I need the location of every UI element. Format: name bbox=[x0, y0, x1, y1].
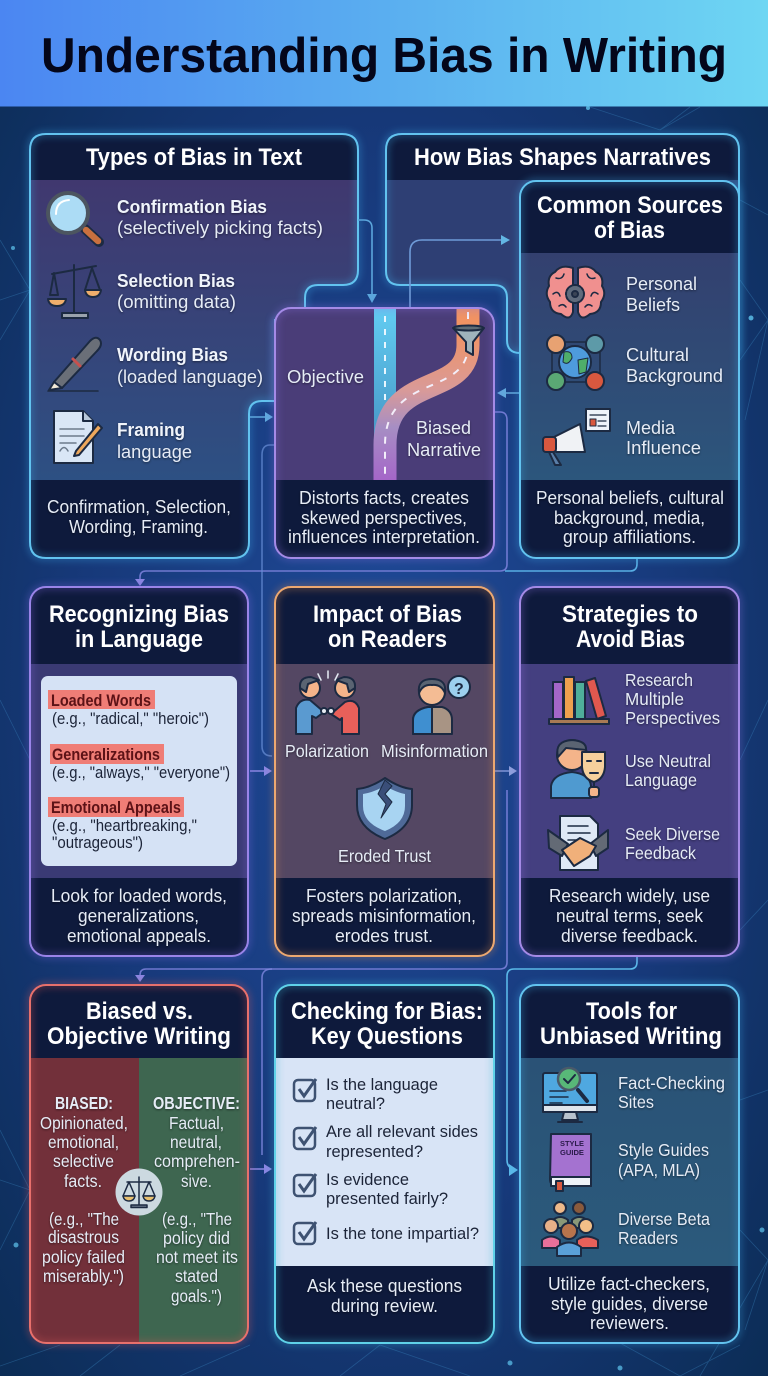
example: loaded words: (e.g., "radical," "heroic") bbox=[52, 709, 209, 728]
heading: on Readers bbox=[328, 626, 447, 653]
footer summary bbox=[307, 1275, 462, 1316]
heading: Types of Bias in Text bbox=[86, 144, 302, 171]
text: seek diverse feedback bbox=[625, 824, 720, 863]
text: use neutral language bbox=[625, 751, 711, 790]
text: confirmation bias: Confirmation Bias bbox=[117, 196, 267, 217]
icon: magnifying glass bbox=[48, 193, 99, 242]
title banner bbox=[0, 0, 768, 106]
heading: Recognizing Bias bbox=[49, 601, 229, 628]
column: objective: neutral, bbox=[170, 1132, 222, 1152]
icon: handshake over document bbox=[548, 816, 608, 870]
column: objective: policy did bbox=[163, 1228, 230, 1248]
text: selection bias: (omitting data) bbox=[117, 291, 236, 312]
text: seek diverse feedback: Seek Diverse bbox=[625, 824, 720, 844]
footer summary bbox=[548, 1273, 710, 1333]
text: use neutral language: Language bbox=[625, 770, 697, 790]
question 3: presented fairly? bbox=[326, 1189, 448, 1208]
text: wording bias: Wording Bias bbox=[117, 344, 228, 365]
footer summary: Distorts facts, creates bbox=[299, 487, 469, 508]
text: selection bias: Selection Bias bbox=[117, 270, 235, 291]
label: misinformation: Misinformation bbox=[381, 741, 488, 761]
book title bbox=[560, 1139, 584, 1157]
footer summary: erodes trust. bbox=[335, 925, 433, 946]
heading: Common Sources bbox=[537, 192, 723, 219]
footer summary: influences interpretation. bbox=[288, 526, 480, 547]
heading: Tools for bbox=[586, 998, 677, 1025]
footer summary: Utilize fact-checkers, bbox=[548, 1273, 710, 1294]
chart: objective and biased roads bbox=[374, 300, 468, 480]
text: framing language: Framing bbox=[117, 419, 185, 440]
question 2: represented? bbox=[326, 1142, 423, 1161]
icon: megaphone and newspaper bbox=[543, 409, 610, 465]
icon: style guide book bbox=[550, 1134, 591, 1191]
footer summary: style guides, diverse bbox=[551, 1293, 708, 1314]
text: media influence: Influence bbox=[626, 437, 701, 458]
label: biased narrative: Narrative bbox=[407, 439, 481, 460]
footer summary: neutral terms, seek bbox=[556, 905, 704, 926]
footer summary: Fosters polarization, bbox=[306, 885, 462, 906]
heading: How Bias Shapes Narratives bbox=[414, 144, 711, 171]
column: biased: emotional, bbox=[48, 1132, 119, 1152]
text: media influence bbox=[626, 417, 701, 458]
text: wording bias: (loaded language) bbox=[117, 366, 263, 387]
icon: balance scale bbox=[48, 265, 101, 318]
heading: Key Questions bbox=[311, 1023, 463, 1050]
icon: brain with gear bbox=[547, 267, 604, 318]
question 1: neutral? bbox=[326, 1094, 385, 1113]
card: bias language examples bbox=[41, 676, 237, 866]
column: biased: miserably.") bbox=[43, 1266, 124, 1286]
text: research multiple perspectives bbox=[625, 670, 720, 728]
heading bbox=[562, 601, 698, 653]
icon: cracked shield bbox=[357, 778, 412, 839]
question 4: Is the tone impartial? bbox=[326, 1224, 479, 1243]
question 1: Is the language bbox=[326, 1075, 438, 1094]
text: cultural background bbox=[626, 344, 723, 386]
column: objective: comprehen- bbox=[154, 1151, 240, 1171]
text: cultural background: Cultural bbox=[626, 344, 689, 365]
footer summary: diverse feedback. bbox=[561, 925, 698, 946]
footer summary: skewed perspectives, bbox=[301, 507, 467, 528]
text: wording bias bbox=[117, 344, 263, 387]
column: objective: stated bbox=[175, 1266, 218, 1286]
footer summary bbox=[549, 885, 710, 946]
footer summary: during review. bbox=[331, 1295, 438, 1316]
label: eroded trust: Eroded Trust bbox=[338, 846, 431, 866]
footer summary: emotional appeals. bbox=[67, 925, 211, 946]
highlight: emotional appeals: Emotional Appeals bbox=[51, 799, 181, 817]
heading: Objective Writing bbox=[47, 1023, 231, 1050]
book title: GUIDE bbox=[560, 1148, 584, 1157]
icon: scale badge bbox=[116, 1168, 162, 1216]
icon: monitor with magnifier check bbox=[543, 1068, 597, 1122]
column: objective: sive. bbox=[181, 1171, 212, 1191]
text: style guides: Style Guides bbox=[618, 1140, 709, 1160]
icon: pen bbox=[48, 338, 101, 391]
footer summary: Look for loaded words, bbox=[51, 885, 227, 906]
text: personal beliefs: Beliefs bbox=[626, 294, 680, 315]
label: objective: Objective bbox=[287, 366, 364, 387]
panel: tools for unbiased writing bbox=[520, 985, 739, 1343]
panel: impact of bias on readers bbox=[275, 587, 494, 956]
panel: center objective vs biased narrative bbox=[275, 300, 494, 558]
column: biased: (e.g., "The bbox=[49, 1209, 119, 1229]
text: personal beliefs bbox=[626, 273, 697, 315]
icon: misinformation, person with question bubble bbox=[413, 676, 470, 734]
panel: recognizing bias in language bbox=[30, 587, 248, 956]
heading bbox=[291, 998, 483, 1050]
panel: common sources of bias bbox=[520, 181, 739, 558]
footer summary bbox=[288, 487, 480, 547]
question 3 bbox=[294, 1170, 448, 1208]
text: research multiple perspectives: Multiple bbox=[625, 689, 684, 709]
example: emotional appeals: "outrageous") bbox=[52, 833, 143, 852]
footer summary bbox=[536, 487, 724, 547]
text: selection bias bbox=[117, 270, 236, 312]
question 2: Are all relevant sides bbox=[326, 1122, 478, 1141]
text: framing language: language bbox=[117, 441, 192, 462]
footer summary: Wording, Framing. bbox=[69, 516, 208, 537]
heading: of Bias bbox=[594, 217, 665, 244]
text: framing language bbox=[117, 419, 192, 462]
heading bbox=[537, 192, 723, 244]
footer summary: Research widely, use bbox=[549, 885, 710, 906]
example: generalizations: (e.g., "always," "everyone") bbox=[52, 763, 230, 782]
column: biased: disastrous bbox=[48, 1227, 119, 1247]
icon: document with pencil bbox=[54, 411, 102, 463]
column: objective: Factual, bbox=[169, 1113, 224, 1133]
panel: strategies to avoid bias bbox=[520, 587, 739, 956]
text: fact-checking sites: Fact-Checking bbox=[618, 1073, 725, 1093]
label: polarization: Polarization bbox=[285, 741, 369, 761]
title: Understanding Bias in Writing bbox=[41, 29, 727, 83]
column: objective: not meet its bbox=[156, 1247, 238, 1267]
text: style guides: (APA, MLA) bbox=[618, 1160, 700, 1180]
column: biased bbox=[40, 1093, 128, 1286]
heading bbox=[540, 998, 722, 1050]
column: biased: BIASED: bbox=[55, 1093, 113, 1113]
label: biased narrative: Biased bbox=[416, 417, 471, 438]
column: biased: selective bbox=[53, 1151, 114, 1171]
text: personal beliefs: Personal bbox=[626, 273, 697, 294]
text: diverse beta readers: Diverse Beta bbox=[618, 1209, 710, 1229]
panel: how bias shapes narratives bbox=[380, 130, 745, 360]
text: diverse beta readers bbox=[618, 1209, 710, 1248]
text: diverse beta readers: Readers bbox=[618, 1228, 678, 1248]
panel: checking for bias key questions bbox=[275, 985, 494, 1343]
heading: Biased vs. bbox=[86, 998, 193, 1025]
text: use neutral language: Use Neutral bbox=[625, 751, 711, 771]
panel: types of bias in text bbox=[28, 130, 363, 562]
checklist bbox=[294, 1075, 479, 1244]
footer summary: Ask these questions bbox=[307, 1275, 462, 1296]
text: research multiple perspectives: Research bbox=[625, 670, 693, 690]
book title: STYLE bbox=[560, 1139, 584, 1148]
question 3: Is evidence bbox=[326, 1170, 409, 1189]
heading: Avoid Bias bbox=[576, 626, 685, 653]
heading: Impact of Bias bbox=[313, 601, 462, 628]
footer summary: reviewers. bbox=[590, 1312, 669, 1333]
heading: Strategies to bbox=[562, 601, 698, 628]
question 2 bbox=[294, 1122, 478, 1161]
column: biased: facts. bbox=[64, 1171, 102, 1191]
footer summary: background, media, bbox=[554, 507, 705, 528]
heading bbox=[313, 601, 462, 653]
question 1 bbox=[294, 1075, 438, 1113]
panel: biased vs objective writing bbox=[30, 985, 248, 1343]
column: objective: (e.g., "The bbox=[162, 1209, 232, 1229]
icon: funnel bbox=[453, 326, 484, 355]
connector arrows behind panels bbox=[135, 220, 637, 1176]
highlight: loaded words: Loaded Words bbox=[51, 692, 151, 710]
text: research multiple perspectives: Perspectives bbox=[625, 708, 720, 728]
highlight: generalizations: Generalizations bbox=[52, 746, 160, 764]
text: style guides bbox=[618, 1140, 709, 1180]
question 4 bbox=[294, 1222, 479, 1244]
question mark: ? bbox=[454, 681, 464, 698]
example: emotional appeals: (e.g., "heartbreaking," bbox=[52, 816, 197, 835]
heading bbox=[47, 998, 231, 1050]
footer summary bbox=[292, 885, 476, 946]
label: biased narrative bbox=[407, 417, 481, 460]
text: fact-checking sites bbox=[618, 1073, 725, 1112]
heading: in Language bbox=[75, 626, 203, 653]
text: cultural background: Background bbox=[626, 365, 723, 386]
column: objective bbox=[153, 1093, 240, 1306]
text: confirmation bias: (selectively picking facts) bbox=[117, 217, 323, 238]
footer summary: generalizations, bbox=[78, 905, 199, 926]
icon: person holding neutral mask bbox=[551, 740, 605, 798]
footer summary bbox=[51, 885, 227, 946]
footer summary: Personal beliefs, cultural bbox=[536, 487, 724, 508]
footer summary bbox=[47, 496, 231, 537]
footer summary: Confirmation, Selection, bbox=[47, 496, 231, 517]
heading bbox=[49, 601, 229, 653]
column: objective: goals.") bbox=[171, 1286, 222, 1306]
icon: globe and people bbox=[547, 335, 604, 390]
column: biased: policy failed bbox=[42, 1247, 125, 1267]
footer summary: spreads misinformation, bbox=[292, 905, 476, 926]
text: seek diverse feedback: Feedback bbox=[625, 843, 696, 863]
text: media influence: Media bbox=[626, 417, 676, 438]
example: emotional appeals bbox=[52, 816, 197, 852]
icon: books on a shelf bbox=[549, 677, 609, 724]
column: biased: Opinionated, bbox=[40, 1113, 128, 1133]
text: fact-checking sites: Sites bbox=[618, 1092, 654, 1112]
column: objective: OBJECTIVE: bbox=[153, 1093, 240, 1113]
heading: Unbiased Writing bbox=[540, 1023, 722, 1050]
heading: Checking for Bias: bbox=[291, 998, 483, 1025]
icon: diverse group of readers bbox=[542, 1202, 598, 1256]
footer summary: group affiliations. bbox=[563, 526, 696, 547]
text: confirmation bias bbox=[117, 196, 323, 238]
icon: polarization, two people arguing bbox=[296, 671, 359, 734]
